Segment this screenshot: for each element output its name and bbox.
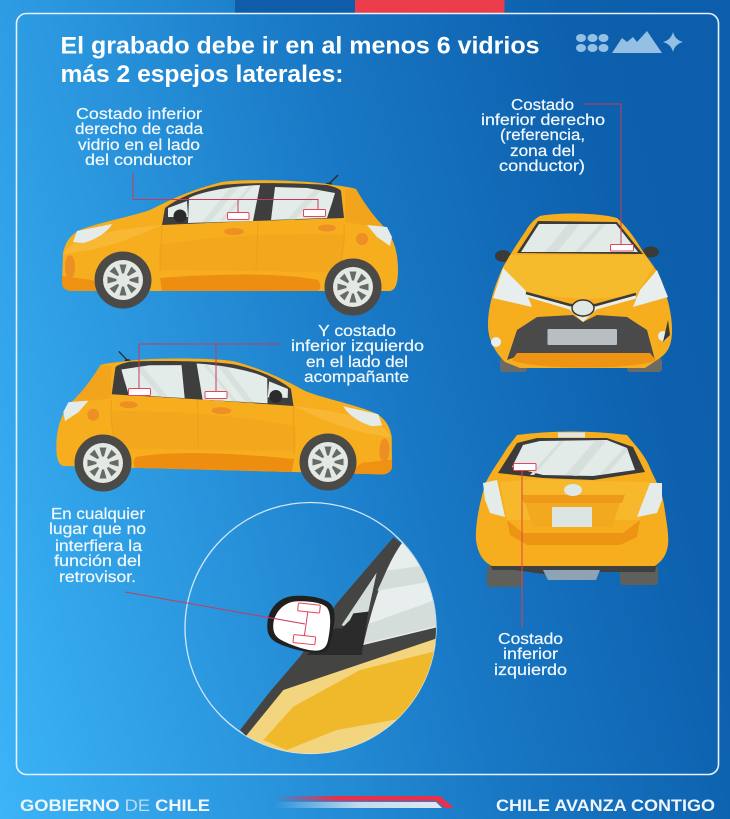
label: mirror: interfiera la	[55, 538, 142, 555]
windshield tag and leader line	[583, 104, 634, 251]
top accent bar	[235, 0, 504, 14]
label: driver side	[75, 106, 203, 169]
label: rear view: Costado	[498, 631, 563, 648]
label: driver side: derecho de cada	[75, 121, 203, 138]
label: mirror	[49, 506, 146, 586]
label: mirror: lugar que no	[49, 521, 146, 538]
title	[60, 32, 540, 88]
rear window tag and leader line	[514, 464, 536, 627]
window tags and leader line	[133, 173, 326, 220]
icon: brand dots, mountains and star	[576, 31, 683, 53]
title: más 2 espejos laterales:	[60, 61, 344, 88]
footer: left wordmark: GOBIERNO DE CHILE	[20, 796, 210, 815]
label: front view	[481, 97, 605, 175]
rear view car	[476, 432, 668, 627]
label: passenger side: acompañante	[304, 369, 409, 386]
footer: right wordmark: CHILE AVANZA CONTIGO	[496, 796, 715, 815]
label: rear view: izquierdo	[494, 662, 567, 679]
label: passenger side: en el lado del	[306, 354, 408, 371]
front view car	[488, 104, 672, 372]
footer: centre stripe	[275, 796, 454, 808]
label: passenger side: inferior izquierdo	[291, 338, 424, 355]
label: rear view: inferior	[503, 646, 558, 663]
mirror detail circle	[125, 502, 447, 767]
label: front view: conductor)	[499, 158, 585, 175]
label: passenger side	[291, 323, 424, 386]
side car: passenger side	[56, 344, 395, 492]
label: driver side: del conductor	[85, 152, 193, 169]
title: El grabado debe ir en al menos 6 vidrios	[60, 32, 540, 60]
label: mirror: función del	[54, 553, 141, 570]
label: front view: zona del	[510, 143, 575, 160]
label: front view: inferior derecho	[481, 112, 605, 129]
label: mirror: retrovisor.	[59, 569, 136, 586]
window tags and leader line	[128, 344, 280, 398]
label: rear view	[494, 631, 567, 679]
label: mirror: En cualquier	[51, 506, 145, 523]
label: driver side: vidrio en el lado	[78, 137, 200, 154]
label: front view: Costado	[511, 97, 574, 114]
side car: driver side	[62, 173, 398, 316]
label: passenger side: Y costado	[318, 323, 396, 340]
label: driver side: Costado inferior	[76, 106, 202, 123]
side mirror	[125, 592, 335, 653]
label: front view: (referencia,	[500, 127, 585, 144]
